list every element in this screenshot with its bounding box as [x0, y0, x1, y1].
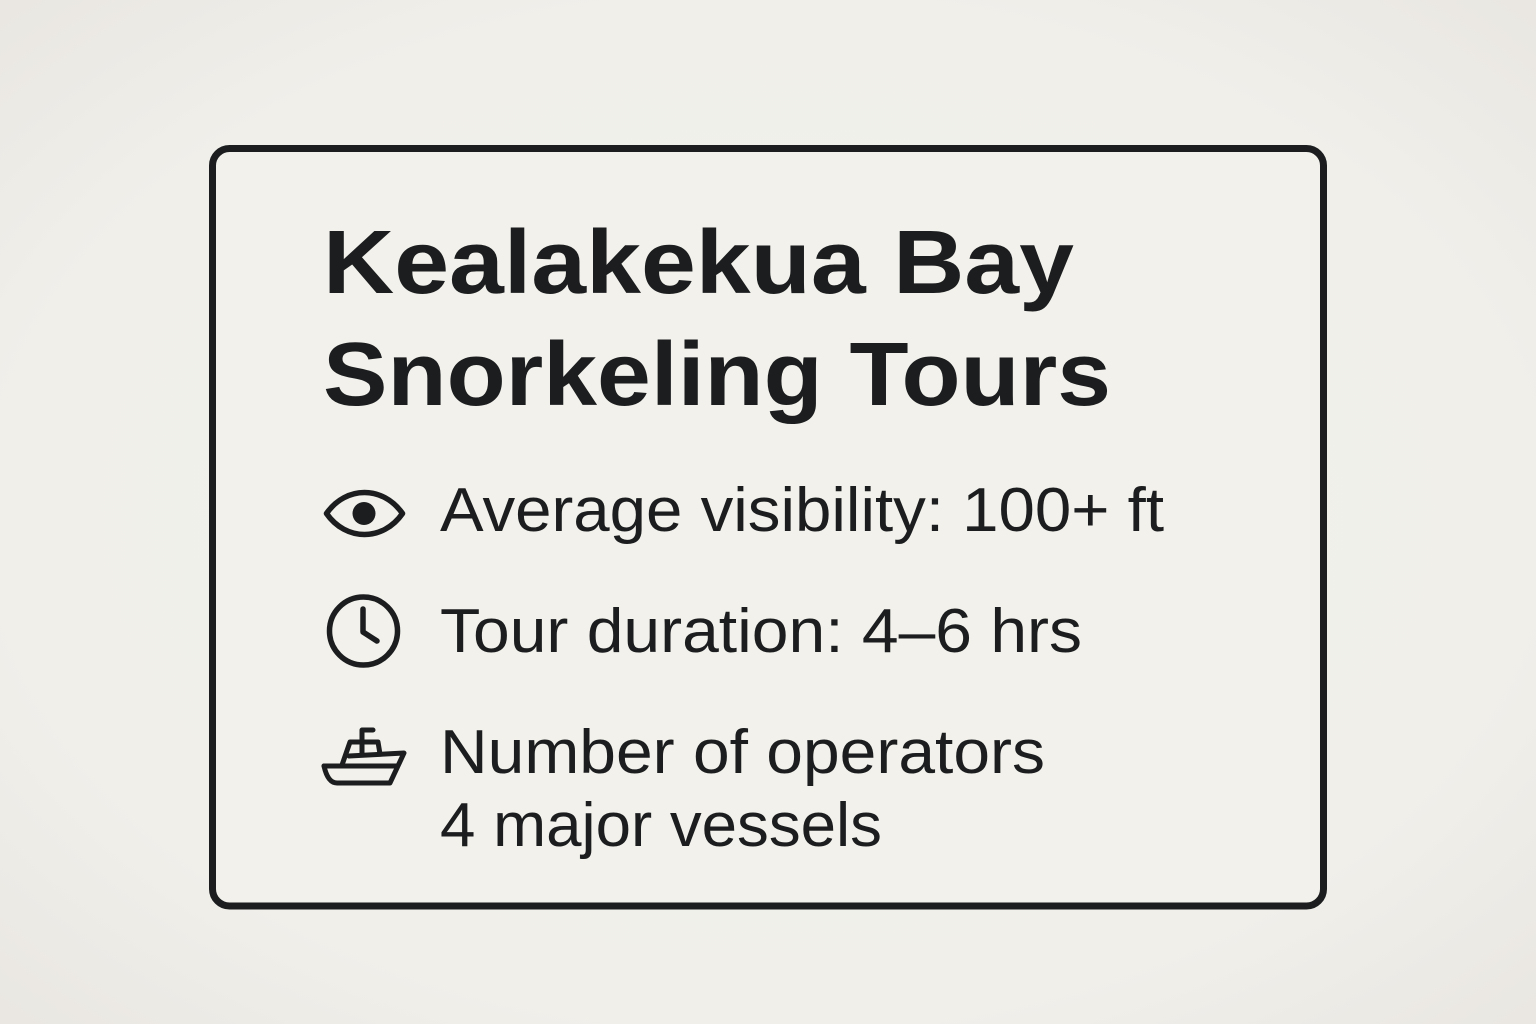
text: number of operators: 4 major vessels	[440, 791, 882, 860]
title: Snorkeling Tours	[323, 325, 1111, 425]
icon: boat	[324, 730, 404, 783]
text: average visibility: Average visibility: 100+ ft	[440, 476, 1164, 545]
panel border	[212, 148, 1324, 906]
panel: info card	[212, 148, 1324, 906]
icon: clock	[330, 597, 398, 665]
title: Kealakekua Bay	[323, 213, 1074, 313]
icon: eye	[326, 492, 402, 534]
title	[323, 213, 1111, 425]
text: tour duration: Tour duration: 4–6 hrs	[440, 597, 1082, 666]
text: number of operators	[440, 718, 1045, 860]
text: number of operators: Number of operators	[440, 718, 1045, 787]
